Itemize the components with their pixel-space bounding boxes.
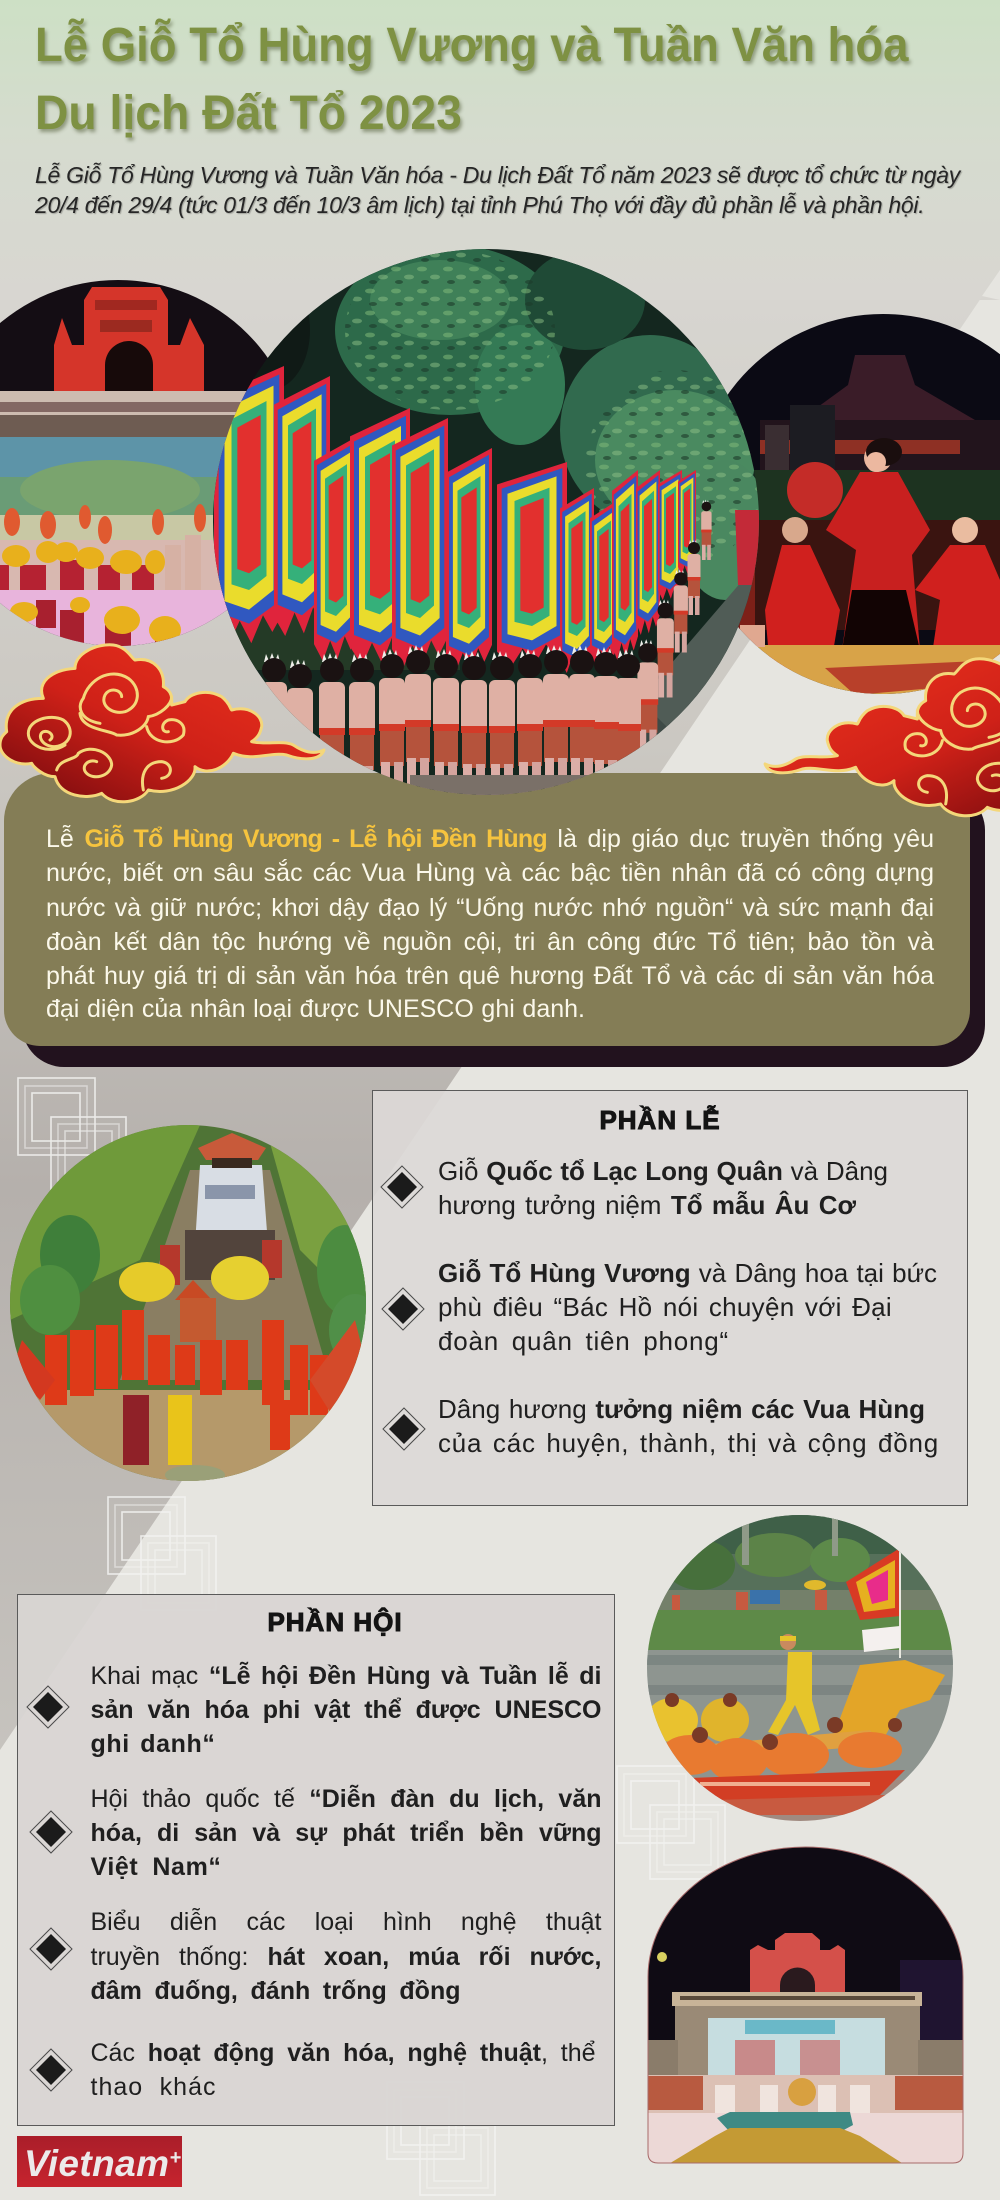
intro text block: đoàn kết dân tộc hướng về nguồn cội, tri ân công đức Tổ tiên; bảo tồn và: [46, 928, 934, 956]
title: [35, 18, 912, 142]
title: Lễ Giỗ Tổ Hùng Vương và Tuần Văn hóa: [35, 19, 908, 72]
list: Phần Hội items: Biểu diễn các loại hình nghệ thuật: [90, 1908, 602, 1936]
list: Phần Lễ items: đoàn quân tiên phong“: [438, 1326, 729, 1356]
panel: Phần Hội: [17, 1594, 615, 2126]
list: Phần Hội items: thao khác: [90, 2073, 216, 2101]
intro text block: đại diện của nhân loại được UNESCO ghi danh.: [46, 995, 585, 1023]
list: Phần Lễ items: Dâng hương tưởng niệm các Vua Hùng: [438, 1394, 925, 1424]
list: Phần Hội items: Các hoạt động văn hóa, nghệ thuật, thể: [90, 2039, 596, 2067]
photo: dragon boat race: [647, 1515, 953, 1821]
subtitle text block: [34, 162, 962, 220]
intro text block: nước, biết ơn sâu sắc các Vua Hùng và các bậc tiền nhân đã có công dựng: [46, 859, 934, 887]
photo: arch-shaped stage show: [648, 1846, 964, 2164]
list: Phần Lễ items: của các huyện, thành, thị và cộng đồng: [438, 1428, 939, 1458]
intro text block: phát huy giá trị di sản văn hóa trên quê hương Đất Tổ và các di sản văn hóa: [46, 962, 934, 990]
icon: diamond bullet: [29, 1810, 73, 1854]
photo: Hat Xoan singers: [728, 314, 1000, 694]
subtitle text block: 20/4 đến 29/4 (tức 01/3 đến 10/3 âm lịch) tại tỉnh Phú Thọ với đầy đủ phần lễ và phần hội.: [35, 192, 924, 218]
heading: Phần Hội: PHẦN HỘI: [267, 1607, 403, 1637]
icon: diamond bullet: [29, 2048, 73, 2092]
intro text block: Lễ Giỗ Tổ Hùng Vương - Lễ hội Đền Hùng là dịp giáo dục truyền thống yêu: [46, 825, 934, 853]
list: Phần Hội items: Hội thảo quốc tế “Diễn đàn du lịch, văn: [90, 1785, 602, 1813]
icon: diamond bullet: [380, 1165, 424, 1209]
list: Phần Lễ items: Giỗ Tổ Hùng Vương và Dâng hoa tại bức: [438, 1258, 937, 1288]
list: Phần Lễ items: Giỗ Quốc tổ Lạc Long Quân và Dâng: [438, 1156, 888, 1186]
list: Phần Hội items: [26, 1662, 602, 2101]
intro text block: nước và giữ nước; khơi dậy đạo lý “Uống nước nhớ nguồn“ và sức mạnh đại: [46, 894, 934, 922]
intro text block: [46, 824, 934, 1023]
subtitle text block: Lễ Giỗ Tổ Hùng Vương và Tuần Văn hóa - Du lịch Đất Tổ năm 2023 sẽ được tổ chức từ ngày: [35, 162, 960, 188]
list: Phần Hội items: sản văn hóa phi vật thể được UNESCO: [90, 1696, 602, 1724]
list: Phần Hội items: đâm đuống, đánh trống đồng: [90, 1977, 460, 2005]
icon: diamond bullet: [29, 1927, 73, 1971]
icon: diamond bullet: [382, 1407, 426, 1451]
icon: left decorative red cloud: [0, 643, 326, 804]
list: Phần Lễ items: hương tưởng niệm Tổ mẫu Âu Cơ: [438, 1190, 856, 1220]
icon: right decorative red cloud: [764, 657, 1000, 818]
logo: Vietnam+: Vietnam+: [24, 2143, 181, 2184]
list: Phần Hội items: Việt Nam“: [90, 1853, 222, 1881]
icon: diamond bullet: [381, 1287, 425, 1331]
list: Phần Hội items: ghi danh“: [90, 1730, 216, 1758]
icon: diamond bullet: [26, 1685, 70, 1729]
intro panel: [4, 773, 985, 1067]
title: Du lịch Đất Tổ 2023: [35, 87, 462, 140]
list: Phần Hội items: Khai mạc “Lễ hội Đền Hùng và Tuần lễ di: [90, 1662, 602, 1690]
list: Phần Lễ items: [380, 1156, 939, 1458]
list: Phần Lễ items: phù điêu “Bác Hồ nói chuyện với Đại: [438, 1292, 892, 1322]
photo: flag procession: [213, 249, 759, 795]
list: Phần Hội items: hóa, di sản và sự phát triển bền vững: [90, 1819, 602, 1847]
list: Phần Hội items: truyền thống: hát xoan, múa rối nước,: [90, 1943, 602, 1971]
photo: temple gate stage performance: [0, 280, 268, 646]
photo: palanquin procession at temple: [10, 1125, 366, 1481]
panel: Phần Lễ: [372, 1090, 968, 1506]
heading: Phần Lễ: PHẦN LỄ: [599, 1105, 721, 1135]
